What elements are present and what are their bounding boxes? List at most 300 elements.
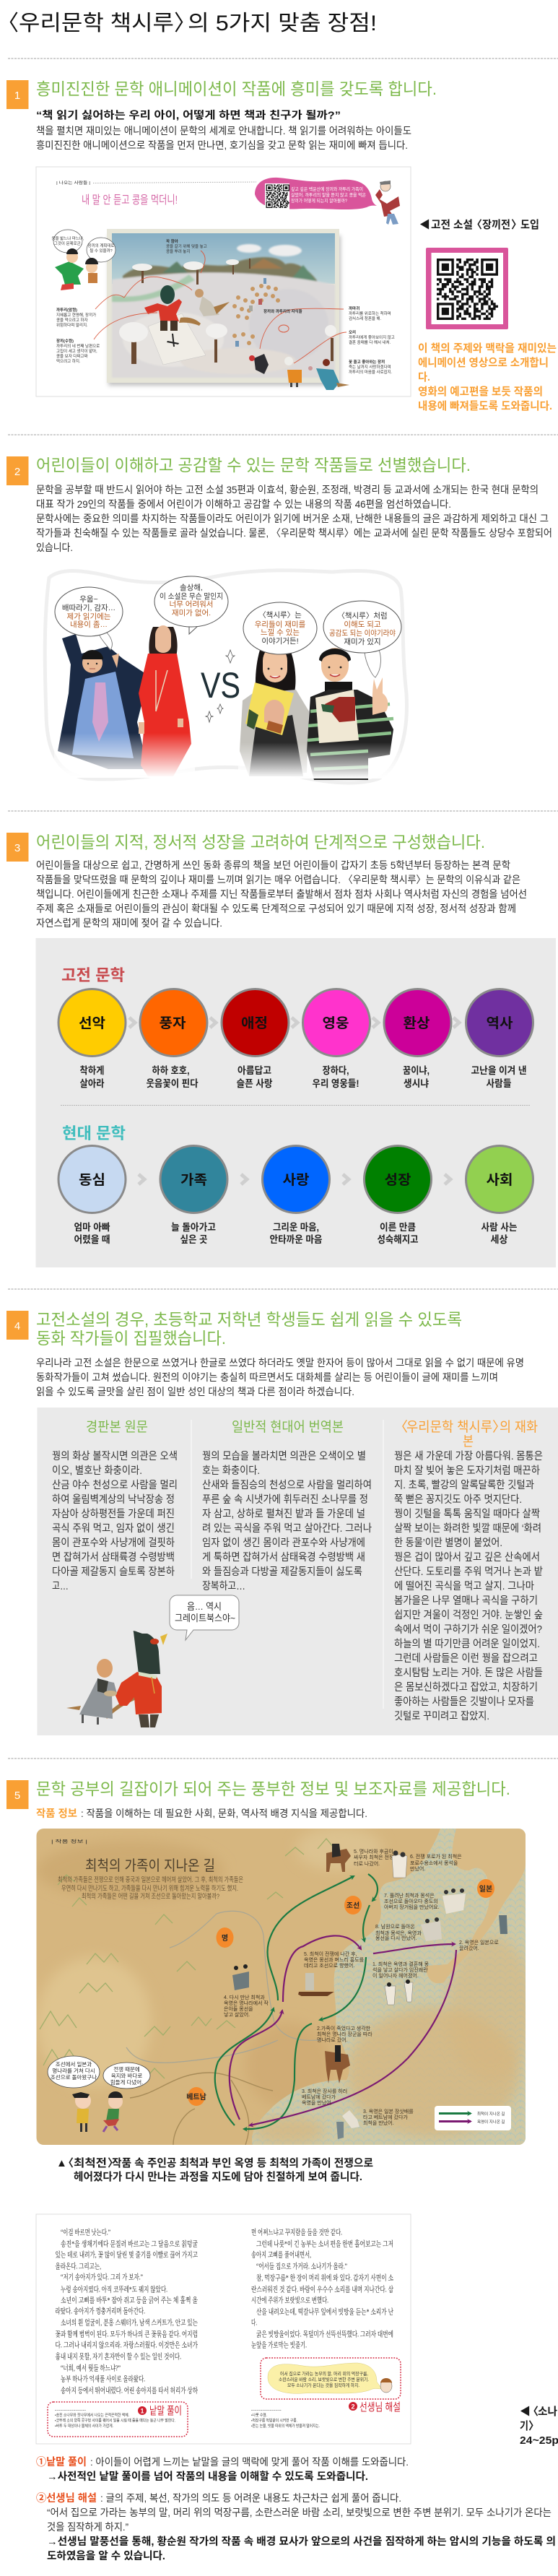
- section 4: [6, 1310, 558, 1735]
- left text column: 송아지 등에서 뛰어내렸다. 어린 송아지를 타서 허리가 상하: [61, 2386, 199, 2395]
- map notes: 베트남에 갔다가: [302, 2094, 336, 2100]
- map caption: 헤어졌다가 다시 만나는 과정을 지도에 담아 친절하게 보여 줍니다.: [74, 2171, 362, 2183]
- VS mark: VS: [201, 665, 240, 706]
- caption: 소나기: [520, 2406, 558, 2447]
- map notes: 최척은 명나라 장군을 따라: [317, 2031, 372, 2037]
- heading 4: [36, 1310, 462, 1348]
- painting annotations: 결혼 중매를 다 해서 내쳐.: [349, 339, 391, 345]
- paragraph 4: 우리나라 고전 소설은 한문으로 쓰였거나 한글로 쓰였다 하더라도 옛말 한자어 등이 많아서 그대로 읽을 수 없기 때문에 유명: [36, 1357, 524, 1369]
- word glossary callout: 1: [140, 2408, 144, 2415]
- speech bubble: great books: [170, 1595, 239, 1640]
- chevrons row 2: [139, 1174, 450, 1184]
- column: 일반적 현대어 번역본: 게 툭하면 잡혀가서 삼태육경 수령방백 새: [202, 1551, 365, 1564]
- painting annotations: 까투리(암꿩): [56, 307, 77, 313]
- stage: 선악: 살아라: [79, 1078, 105, 1089]
- word glossary callout: 낱말 풀이: [149, 2405, 182, 2417]
- left text column: “이걸 바르면 낫는다.”: [61, 2227, 110, 2237]
- right text column: “어서들 집으로 가거라. 소나기가 올라.”: [256, 2262, 347, 2271]
- column: 우리문학 책시루 재화본: 〉: [492, 1419, 506, 1435]
- column: 일반적 현대어 번역본: 꿩의 모습을 볼라치면 의관은 오색이오 별: [202, 1450, 366, 1462]
- column: 우리문학 책시루 재화본: 산단다. 도토리를 주워 먹거나 논과 밭: [394, 1566, 543, 1578]
- map notes: 7. 풀려난 최척과 몽석은: [384, 1892, 435, 1899]
- title: [0, 12, 377, 35]
- map caption: 〉: [108, 2157, 118, 2169]
- kids and bubbles: 그것이 문제로군.: [54, 240, 82, 246]
- paragraph 3: 어린이들을 대상으로 쉽고, 간명하게 쓰인 동화 종류의 책을 보던 어린이들이 갑자기 초등 5학년부터 등장하는 본격 문학: [36, 859, 510, 871]
- column: 경판본 원문: 면 잡혀가서 삼태륙경 수령방백: [52, 1551, 175, 1564]
- column: 우리문학 책시루 재화본: 의 재화: [500, 1419, 538, 1435]
- title: 의 5가지 맞춤 장점!: [188, 12, 377, 35]
- map notes: 4. 다시 만난 최척과: [224, 1994, 265, 2000]
- stage: 사회: 사회: [487, 1172, 513, 1188]
- orange note: 내용에 빠져들도록 도와줍니다.: [418, 400, 552, 412]
- map legend: 최척이 지나온 길: [477, 2111, 505, 2117]
- painting annotations: [56, 238, 395, 375]
- column: 일반적 현대어 번역본: 호는 화충이다.: [202, 1465, 260, 1477]
- right text column: 산을 내려오는데, 떡갈나무 잎에서 빗방울 듣는* 소리가 난: [256, 2307, 394, 2317]
- stage: 가족: 늘 돌아가고: [171, 1222, 216, 1233]
- map title: | 작품 정보 |: [51, 1839, 88, 1844]
- map title: [51, 1839, 243, 1901]
- caption: 소나기: ◀: [520, 2406, 531, 2418]
- speech bubble: left boy: [55, 587, 123, 650]
- column: 우리문학 책시루 재화본: 에 떨어진 곡식을 먹고 살지. 그나마: [394, 1580, 534, 1592]
- stage: 애정: [222, 989, 289, 1089]
- paragraph 3: 작품들을 맞닥뜨렸을 때 문학의 깊이나 재미를 느끼며 읽기는 매우 어렵습니다. 〈우리문학 책시루〉는 문학의 이유식과 같은: [36, 874, 520, 885]
- stage: 영웅: 우리 영웅들!: [312, 1078, 359, 1089]
- stage: 사회: 세상: [491, 1234, 508, 1245]
- label: 선생님 해설: 선생님 해설: [359, 2401, 401, 2414]
- teacher commentary callout: 어서 집으로 가라는 농부의 말, 머리 위의 먹장구름,: [280, 2370, 368, 2377]
- note: teacher commentary: 도하였음을 알 수 있습니다.: [47, 2550, 165, 2562]
- painting annotations: 위험하다며 말리지.: [56, 322, 88, 328]
- icon: man scratching head: [375, 181, 400, 225]
- stage: 동심: [58, 1145, 126, 1245]
- pink speech blob with QR: [255, 178, 377, 209]
- painting annotations: 장끼와 까투리의 자식들: [263, 308, 302, 314]
- column: 경판본 원문: 곡식 주워 먹고, 임자 없이 생긴: [52, 1522, 175, 1535]
- speech bubble: right girl: 이야기거든!: [261, 636, 299, 646]
- caption: 장끼전: 〉: [511, 219, 522, 231]
- note: teacher commentary: 것을 짐작하게 하지.”: [47, 2521, 128, 2533]
- map notes: 2. 옥영은 일본으로: [459, 1939, 499, 1946]
- painting annotations: 검식스레 청혼을 해.: [349, 316, 382, 321]
- word glossary callout: •송진 소나무와 잣나무에서 나오는 끈적끈적한 액체.: [55, 2412, 129, 2418]
- note: teacher commentary: [36, 2492, 556, 2562]
- painting annotations: 먹으려고 하지.: [56, 358, 81, 364]
- painting annotations: 고집이 세고 생각이 얕아,: [56, 348, 97, 354]
- speech bubble: left girl: 솔상해,: [180, 583, 203, 592]
- speech bubble: left girl: 이 소설은 무슨 말인지: [160, 592, 223, 601]
- badge 1: [6, 80, 29, 109]
- pink speech blob with QR: 장끼가 어떻게 되는지 알아볼까?: [291, 197, 347, 204]
- painting spread: [94, 229, 349, 390]
- teacher commentary callout: 모두 소나기가 온다는 것을 짐작하게 하지.: [287, 2382, 359, 2388]
- stage: 역사: 고난을 이겨 낸: [471, 1065, 527, 1076]
- pink speech blob with QR: 깊고 깊은 백운산에 장끼와 까투리 가족이: [291, 186, 363, 192]
- map notes: 타고 베트남에 갔다가: [363, 2114, 408, 2120]
- paragraph 3: 책입니다. 어린이들에게 친근한 소재나 주제를 지닌 작품들로부터 출발해서 점차 점차 사회나 역사처럼 자신의 경험을 넘어선: [36, 888, 527, 900]
- teacher commentary callout: [261, 2358, 401, 2399]
- left text column: 있는 데로 내려가, 꽃 많이 달린 몇 줄기를 이빨로 끊어 가지고: [55, 2250, 198, 2259]
- note: word glossary: ①낱말 풀이: [36, 2456, 87, 2468]
- kids and bubbles: 될 수 있을까?: [90, 248, 113, 253]
- right page footnotes: •듣는 눈물, 빗물 따위의 액체가 방울져 떨어지는.: [251, 2423, 320, 2429]
- map notes: 만났어.: [410, 1865, 425, 1872]
- speech bubble: right boy: 〈책시루〉처럼: [337, 611, 388, 620]
- orange note: [418, 342, 557, 412]
- Japan: [426, 1829, 526, 1983]
- speech bubble: right boy: 재미가 있지: [344, 638, 381, 646]
- caption: 소나기: 〈: [528, 2406, 539, 2418]
- paragraph 3: 자연스럽게 문학의 재미에 젖어 갈 수 있습니다.: [36, 917, 222, 929]
- subheading question: “책 읽기 싫어하는 우리 아이, 어떻게 하면 책과 친구가 될까?”: [36, 110, 341, 121]
- right page footnotes: •먹장구름 먹빛같이 시커먼 구름.: [251, 2418, 297, 2424]
- map legend: [435, 2106, 511, 2130]
- kids with bubbles: 전쟁 때문에: [113, 2065, 140, 2073]
- book page sample: 장끼전: [36, 167, 411, 396]
- sea: [252, 1829, 534, 2145]
- caption: 소나기: 기: [520, 2420, 528, 2432]
- stage: 역사: 사람들: [487, 1078, 511, 1089]
- column: 우리문학 책시루 재화본: 마치 잘 빚어 놓은 도자기처럼 매끈하: [394, 1465, 540, 1477]
- section 1: [6, 79, 557, 412]
- bottom characters: [249, 354, 349, 390]
- note: word glossary: [36, 2456, 409, 2483]
- badge 2: [6, 456, 29, 485]
- column: 우리문학 책시루 재화본: 〈: [394, 1419, 408, 1435]
- paragraph 2: 있습니다.: [36, 542, 73, 553]
- map notes: 석을 낳고 살다가 임진왜란: [372, 1966, 428, 1973]
- map notes: 조선으로 돌아오다 중도의: [384, 1898, 438, 1904]
- kid: girl in red robe: [139, 625, 191, 776]
- left text column: 다. 그러나 내리지 않으리라. 자랑스러웠다. 이것만은 소녀가: [55, 2340, 199, 2350]
- stage: 사랑: 안타까운 마음: [270, 1234, 322, 1245]
- stage: 영웅: 장하다,: [322, 1065, 349, 1076]
- paragraph 2: 문학을 공부할 때 반드시 읽어야 하는 고전 소설 35편과 이효석, 황순원, 조정래, 박경리 등 교과서에 소개되는 한국 현대 문학의: [36, 484, 539, 495]
- word glossary callout: •코뚜레 소의 양쪽 콧구멍 사이를 꿰어서 일을 시킬 때 줄을 매다는 둥근 나무 말한다.: [55, 2418, 175, 2424]
- map legend: 옥영이 지나온 길: [477, 2119, 505, 2125]
- stage: 사랑: 사랑: [283, 1172, 309, 1188]
- painting annotations: 콩을 먹으려고 하자: [56, 317, 88, 323]
- heading: 현대 문학: 현대 문학: [62, 1124, 126, 1142]
- right text column: 면 어쩌느냐고 꾸지람을 들을 것만 같다.: [251, 2227, 342, 2237]
- heading 4: 고전소설의 경우, 초등학교 저학년 학생들도 쉽게 읽을 수 있도록: [36, 1310, 462, 1329]
- speech bubble: right boy: 공감도 되는 이야기라야: [329, 628, 396, 638]
- left text column: 소녀의 흰 얼굴이, 분홍 스웨터가, 남색 스커트가, 안고 있는: [61, 2318, 198, 2327]
- column: 우리문학 책시루 재화본: 그런데 사람들은 이런 꿩을 잡으려고: [394, 1652, 538, 1665]
- column: 우리문학 책시루 재화본: 속에서 먹이 구하기가 쉬운 일이겠어?: [394, 1623, 542, 1636]
- map notes: 몽선을 다시 만났어.: [375, 1935, 417, 1941]
- map title: 최척의 가족들은 어떤 길을 거쳐 조선으로 돌아왔는지 알아볼까?: [82, 1892, 219, 1901]
- column: 우리문학 책시루 재화본: 본: [463, 1434, 474, 1449]
- heading: 고전 문학: 고전 문학: [61, 966, 125, 984]
- map notes: 3. 최척은 장사를 하러: [302, 2088, 347, 2094]
- section 2: [6, 456, 552, 783]
- speech bubble: left girl: [154, 576, 228, 634]
- stage: 역사: 역사: [487, 1015, 513, 1031]
- chevrons row 1: [129, 1018, 459, 1028]
- column: 경판본 원문: 다아골 제갈동지 슬토록 장본하: [52, 1566, 175, 1578]
- country markers: 명: [222, 1934, 228, 1943]
- right text column: 송아지 고삐를 풀어내면서,: [251, 2250, 311, 2259]
- column: 경판본 원문: 꿩의 화상 볼작시면 의관은 오색: [52, 1450, 178, 1462]
- map notes: 옥영은 명나라에서 작: [224, 2000, 269, 2006]
- kids and bubbles: [51, 230, 115, 290]
- title: 〉: [174, 12, 196, 35]
- stage: 가족: [160, 1145, 227, 1245]
- map notes: 8. 남원으로 돌아온: [375, 1923, 415, 1930]
- paragraph 4: [36, 1357, 524, 1397]
- stage: 풍자: [140, 989, 207, 1089]
- column: 경판본 원문: 산금 야수 천성으로 사람을 멀리: [52, 1479, 178, 1491]
- painting annotations: 지혜롭고 현명해, 장끼가: [56, 312, 96, 318]
- speech bubble: right girl: 느낄 수 있는: [261, 628, 300, 637]
- column: 경판본 원문: 몸이 관포수와 사냥개에 걸핏하: [52, 1537, 175, 1549]
- column: 우리문학 책시루 재화본: [394, 1419, 543, 1722]
- map notes: 최척과 몽석은, 옥영과: [375, 1930, 422, 1936]
- column: 우리문학 책시루 재화본: 깃털로 꾸미려고 잡았지.: [394, 1710, 489, 1722]
- stage: 동심: 동심: [79, 1172, 105, 1188]
- map notes: 은아들 몽선을: [224, 2005, 253, 2012]
- column: 일반적 현대어 번역본: 산새와 들짐승의 천성으로 사람을 멀리하여: [202, 1479, 372, 1491]
- speech bubble: great books: 음… 역시: [187, 1601, 222, 1612]
- left text column: 꽃과 함께 범벅이 된다. 모두가 하나의 큰 꽃묶음 같다. 어지럽: [55, 2330, 198, 2338]
- orange note: 에니메이션 영상으로 소개합니: [418, 357, 549, 369]
- stage: 영웅: [303, 989, 370, 1089]
- stage: 애정: 애정: [241, 1015, 268, 1031]
- stage: 성장: 이른 만큼: [380, 1222, 416, 1233]
- column: 우리문학 책시루 재화본: 쭉 뻗은 꽁지깃도 아주 멋지단다.: [394, 1493, 522, 1506]
- painting annotations: 꽃 들고 좋아하는 장끼: [349, 359, 385, 365]
- mountains: [40, 1839, 334, 2080]
- left text column: 송진*을 생채기에다 문질러 바르고는 그 달음으로 칡덩굴: [61, 2239, 198, 2249]
- panel: translation comparison: [38, 1408, 558, 1735]
- speech bubble: right boy: 이해도 되고: [344, 620, 381, 629]
- stage: 환상: [384, 989, 451, 1089]
- map title: 최척의 가족이 지나온 길: [85, 1857, 215, 1874]
- stage: 동심: 어렸을 때: [74, 1234, 110, 1245]
- map notes: 이 일어나자 헤어졌어.: [372, 1972, 419, 1979]
- speech bubble: right girl: [243, 602, 317, 654]
- stage: 동심: 엄마 아빠: [74, 1222, 110, 1233]
- map notes: 5. 최척이 전쟁에 나간 후,: [304, 1951, 357, 1957]
- caption: 장끼전: 장끼전: [482, 219, 510, 231]
- stage: 선악: 선악: [79, 1015, 105, 1031]
- map notes: 아버지 장거림을 만났어요.: [384, 1904, 440, 1910]
- heading 2: 어린이들이 이해하고 공감할 수 있는 문학 작품들로 선별했습니다.: [36, 456, 471, 474]
- heading 4: 동화 작가들이 집필했습니다.: [36, 1329, 226, 1348]
- map caption: ▲: [56, 2157, 67, 2169]
- borders: [130, 2073, 273, 2145]
- speech bubble: left boy: 배따라기, 감자…: [62, 604, 115, 612]
- map notes: 2.가족이 죽었다고 생각한: [317, 2025, 371, 2031]
- painting annotations: 까투리의 마음을 사로잡지.: [349, 369, 393, 375]
- caption: 소나기: 〉: [528, 2420, 539, 2432]
- map notes: 싸우자 최척은 전쟁: [354, 1854, 393, 1860]
- rivers: [126, 1911, 321, 2063]
- badge 1: 1: [14, 90, 20, 102]
- paragraph 3: 주제 혹은 소재들로 어린이들의 관심이 확대될 수 있도록 단계적으로 구성되어 있기 때문에 지적 성장, 정서적 성장과 함께: [36, 903, 516, 914]
- heading 1: 흥미진진한 문학 애니메이션이 작품에 흥미를 갖도록 합니다.: [36, 79, 437, 98]
- caption: 장끼전: ◀: [419, 219, 430, 231]
- stage: 성장: 성장: [384, 1172, 411, 1188]
- painting annotations: 콩을 갈기 위해 덫을 놓고: [166, 243, 207, 249]
- caption: 장끼전: [419, 219, 539, 231]
- character: red-robed pheasant: [144, 285, 201, 331]
- section 5: [6, 1779, 558, 2562]
- stage: 선악: 착하게: [79, 1065, 104, 1076]
- map caption: 〈: [63, 2157, 74, 2169]
- kids with bubbles: 힘들게 다녔어.: [110, 2078, 143, 2086]
- column: 일반적 현대어 번역본: 자 삼고, 상하로 펼쳐진 밭과 들 가운데 널: [202, 1508, 365, 1520]
- badge 5: [6, 1780, 29, 1809]
- photo: kids VS comparison: [45, 571, 407, 783]
- column: 경판본 원문: 이오, 별호난 화충이라.: [52, 1465, 142, 1477]
- right text column: 다.: [251, 2318, 257, 2327]
- note: teacher commentary: →선생님 말풍선을 통해, 황순원 작가의 작품 속 배경 묘사가 앞으로의 사건을 짐작하게 하는 암시의 기능을 하도록 의: [47, 2536, 556, 2548]
- left text column: [55, 2227, 199, 2395]
- heading 5: 문학 공부의 길잡이가 되어 주는 풍부한 정보 및 보조자료를 제공합니다.: [36, 1779, 510, 1798]
- stage: 성장: 성숙해지고: [377, 1234, 419, 1245]
- stage: 선악: [58, 989, 126, 1089]
- map notes: 옥영을 만났어.: [302, 2099, 333, 2106]
- map notes: 6. 전쟁 포로가 된 최척은: [410, 1853, 462, 1860]
- right text column: 시간에 주위가 보랏빛으로 변했다.: [251, 2295, 328, 2305]
- column: 우리문학 책시루 재화본: 꿩이 깃털을 톡톡 움직일 때마다 살짝: [394, 1508, 540, 1520]
- column: 우리문학 책시루 재화본: 우리문학 책시루: [406, 1419, 492, 1435]
- painting annotations: 죽는 날까지 사랑하겠다며: [349, 364, 391, 370]
- right text column: 그런데 나룻*이 긴 농부는 소녀 편을 한번 흘어보고는 그저: [256, 2239, 393, 2249]
- section 3: [6, 833, 556, 1267]
- paragraph 4: 읽을 수 있도록 글맛을 살린 점이 일반 성인 대상의 책과 다른 점이라 하겠습니다.: [36, 1386, 354, 1397]
- kid: boy with book: [307, 648, 393, 780]
- right page footnotes: [251, 2411, 320, 2429]
- speech bubble: left girl: 재미가 없어.: [172, 608, 211, 617]
- column: 일반적 현대어 번역본: 와 들짐승과 다방골 제갈동지들이 싫도록: [202, 1566, 362, 1578]
- painting annotations: 까투리의 네 번째 남편으로: [56, 343, 100, 349]
- map title: 최척의 가족들은 전쟁으로 인해 중국과 일본으로 헤어져 살았어. 그 후, 최척의 가족들은: [58, 1875, 243, 1884]
- column: 일반적 현대어 번역본: [202, 1419, 372, 1592]
- caption: 장끼전: 〈: [471, 219, 482, 231]
- paragraph 2: 문학사에는 중요한 의미를 차지하는 작품들이라도 어린이가 읽기에 버거운 소재, 난해한 내용들의 글은 과감하게 제외하고 대신 그: [36, 513, 549, 524]
- country markers: [186, 1879, 494, 2106]
- stage: 역사: [466, 989, 533, 1089]
- stage: 영웅: 영웅: [322, 1015, 349, 1031]
- column: 우리문학 책시루 재화본: 살짝 보이는 화려한 빛깔 때문에 ‘화려: [394, 1522, 541, 1535]
- left text column: 올라온다. 그리고는,: [55, 2262, 101, 2271]
- column: 우리문학 책시루 재화본: 호시탐탐 노리는 거야. 돈 많은 사람들: [394, 1667, 543, 1679]
- stage: 가족: 싶은 곳: [180, 1234, 208, 1245]
- paragraph 4: 동화작가들이 고쳐 썼습니다. 원전의 이야기는 충실히 따르면서도 대화체를 살리는 등 어린이들이 글에 재미를 느끼며: [36, 1371, 498, 1383]
- column: 경판본 원문: 경판본 원문: [86, 1419, 148, 1435]
- column: 경판본 원문: [52, 1419, 178, 1592]
- left text column: 흉내 내지 못할, 자기 혼자만이 할 수 있는 일인 것이다.: [55, 2351, 181, 2362]
- speech bubble: left boy: 제가 읽기에는: [67, 612, 111, 621]
- column: 우리문학 책시루 재화본: 좋아하는 사람들은 깃발이나 모자를: [394, 1696, 534, 1708]
- stage: 환상: 환상: [403, 1015, 430, 1031]
- paragraph 2: 대표 작가 29인의 작품들 중에서 어린이가 이해하고 공감할 수 있는 내용의 작품 46편을 엄선하였습니다.: [36, 498, 451, 510]
- map caption: 최척전: [74, 2157, 107, 2169]
- map caption: 작품 속 주인공 최척과 부인 옥영 등 최척의 가족이 전쟁으로: [112, 2157, 373, 2169]
- caption: 장끼전: 도입: [520, 219, 539, 231]
- routes: purple: [230, 1935, 456, 2125]
- column: 우리문학 책시루 재화본: 지. 초록, 빨강의 알록달록한 깃털과: [394, 1479, 534, 1491]
- country markers: 베트남: [186, 2092, 206, 2102]
- kids with bubbles: [48, 2056, 150, 2132]
- right text column: 굵은 빗방울이었다. 목덜미가 선뜩선뜩했다. 그러자 대번에: [256, 2330, 393, 2338]
- title: 우리문학 책시루: [19, 12, 174, 35]
- map notes: 포로수용소에서 몽석을: [410, 1860, 458, 1866]
- intro paragraph: [36, 125, 411, 151]
- painting annotations: 오리: [349, 329, 356, 335]
- orange note: 영화의 예고편을 보듯 작품의: [418, 386, 543, 398]
- kids with bubbles: 조선으로 돌아왔구나: [51, 2073, 97, 2081]
- map: 최척의 가족이 지나온 길: [36, 1827, 534, 2145]
- intro paragraph: 흥미진진한 애니메이션으로 작품을 먼저 만나면, 호기심을 갖고 문학 읽는 재미에 빠져 듭니다.: [36, 139, 408, 151]
- crowd of small pheasants: [232, 278, 280, 347]
- map notes: 5. 명나라와 후금이: [354, 1848, 393, 1855]
- word glossary callout: [48, 2402, 188, 2437]
- stage: 환상: 꿈이냐,: [403, 1065, 430, 1076]
- illustration: pheasant pair: [66, 1631, 167, 1727]
- stage: 풍자: 풍자: [159, 1015, 186, 1031]
- stage: 사회: [466, 1145, 533, 1245]
- stage: 사랑: 그리운 마음,: [273, 1222, 319, 1233]
- column: 우리문학 책시루 재화본: 한 동물’이란 별명이 붙었어.: [394, 1537, 502, 1549]
- caption: 소나기: 24~25p: [520, 2434, 558, 2447]
- work info note: 작품 정보: [36, 1808, 77, 1820]
- teacher commentary callout: 소란스러운 바람 소리, 보랏빛으로 변한 주변 분위기.: [279, 2376, 369, 2382]
- speech bubble: left boy: 내용이 좀…: [70, 620, 108, 629]
- painting annotations: 장끼(수꿩): [56, 338, 74, 344]
- map caption: [56, 2157, 373, 2183]
- map notes: 최척을 만났어.: [363, 2120, 394, 2126]
- kid: girl with book: [240, 646, 309, 776]
- stage: 애정: 아름답고: [237, 1065, 271, 1076]
- speech bubble: left girl: 너무 어려워서: [170, 599, 213, 609]
- caption: 장끼전: 고전 소설: [431, 219, 473, 231]
- column: 경판본 원문: 고…: [52, 1581, 69, 1592]
- stage: 사랑: [263, 1145, 329, 1245]
- speech bubble: right boy: [323, 601, 401, 677]
- badge 4: [6, 1311, 29, 1340]
- map notes: 데리고 조선으로 향했어.: [304, 1962, 354, 1969]
- badge 5: 5: [14, 1790, 20, 1802]
- column: 일반적 현대어 번역본: 일반적 현대어 번역본: [232, 1419, 344, 1435]
- sparkle stars: [206, 650, 235, 722]
- character: grey-robed figure: [195, 289, 230, 316]
- handwritten page heading: 내 말 안 듣고 콩을 먹더니!: [82, 194, 178, 207]
- kids with bubbles: 명나라를 거쳐 다시: [52, 2067, 95, 2074]
- stage: 가족: 가족: [180, 1172, 207, 1188]
- stage: 애정: 슬픈 사랑: [237, 1078, 273, 1089]
- note: teacher commentary: ②선생님 해설: [36, 2492, 97, 2505]
- left text column: 농부 하나가 억새풀 사이로 올라왔다.: [61, 2375, 145, 2383]
- panel: literature stages: [36, 938, 556, 1267]
- badge 3: 3: [14, 842, 20, 854]
- intro paragraph: 책을 펼치면 재미있는 애니메이션이 문학의 세계로 안내합니다. 책 읽기를 어려워하는 아이들도: [36, 125, 411, 136]
- left text column: 소년이 고삐를 바투* 잡아 쥐고 등을 긁어 주는 체 훌쩍 올: [61, 2295, 198, 2305]
- small figures: [232, 1844, 507, 2139]
- column: 우리문학 책시루 재화본: 봄가을은 나무 열매나 곡식을 구하기: [394, 1595, 538, 1607]
- column: 일반적 현대어 번역본: 푸른 숲 속 시냇가에 휘두러진 소나무를 정: [202, 1493, 368, 1506]
- right text column: 참, 먹장구름* 한 장이 머리 위에 와 있다. 갑자기 사면이 소: [256, 2273, 393, 2282]
- column: 일반적 현대어 번역본: 려 있는 곡식을 주워 먹고 살아간다. 그러나: [202, 1522, 372, 1535]
- column: 우리문학 책시루 재화본: 쉽지만 겨울이 걱정인 거야. 눈쌓인 숲: [394, 1609, 543, 1621]
- column: 경판본 원문: 자삼아 상하평전들 가운데 퍼진: [52, 1508, 175, 1520]
- painting annotations: 꼭 참아: [166, 238, 178, 244]
